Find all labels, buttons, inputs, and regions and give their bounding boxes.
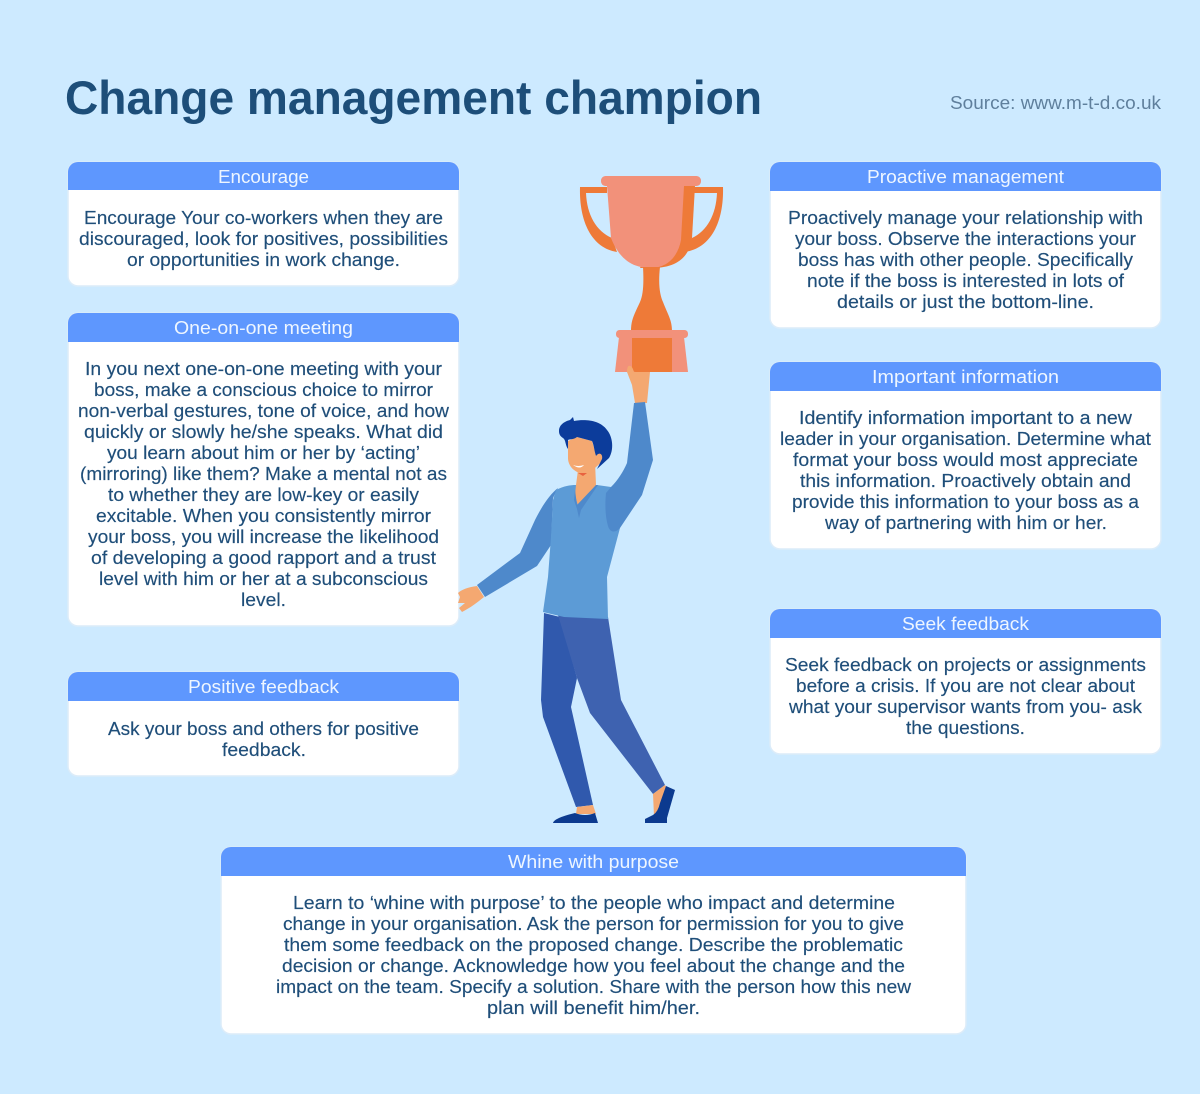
text: seek feedback: before a crisis. If you are not clear about — [796, 675, 1135, 696]
text: one-on-one meeting: non-verbal gestures, tone of voice, and how — [78, 400, 450, 421]
text: one-on-one meeting: your boss, you will increase the likelihood — [88, 526, 439, 547]
text: one-on-one meeting: to whether they are low-key or easily — [108, 484, 420, 505]
text: positive feedback — [108, 718, 419, 760]
panel: proactive management — [770, 162, 1161, 328]
front foot — [653, 785, 667, 816]
heading: important information — [770, 362, 1161, 391]
panel: encourage — [68, 162, 459, 286]
heading: important information: Important information — [872, 366, 1059, 387]
text: one-on-one meeting — [78, 358, 450, 610]
raised arm — [605, 402, 653, 532]
text: seek feedback: the questions. — [906, 717, 1025, 738]
torso — [543, 485, 620, 619]
icon: trophy — [580, 176, 723, 372]
text: important information — [780, 407, 1151, 533]
lowered arm — [477, 488, 558, 597]
text: one-on-one meeting: excitable. When you consistently mirror — [96, 505, 431, 526]
heading: seek feedback: Seek feedback — [902, 613, 1030, 634]
heading: encourage: Encourage — [218, 166, 309, 187]
text: positive feedback: feedback. — [222, 739, 306, 760]
heading: one-on-one meeting — [68, 313, 459, 342]
text: proactive management — [788, 207, 1143, 312]
text: important information: Identify information important to a new — [799, 407, 1133, 428]
text: positive feedback: Ask your boss and others for positive — [108, 718, 419, 739]
heading: positive feedback — [68, 672, 459, 701]
text: one-on-one meeting: level with him or her at a subconscious — [99, 568, 428, 589]
heading: proactive management: Proactive management — [867, 166, 1064, 187]
text: one-on-one meeting: In you next one-on-one meeting with your — [85, 358, 442, 379]
text: important information: way of partnering with him or her. — [824, 512, 1107, 533]
title: Change management champion — [65, 71, 762, 124]
text: whine with purpose: Learn to ‘whine with purpose’ to the people who impact and determine — [293, 892, 895, 913]
text: important information: provide this information to your boss as a — [792, 491, 1140, 512]
text: encourage — [79, 207, 448, 270]
panel: one-on-one meeting — [68, 313, 459, 626]
front leg — [558, 615, 665, 794]
heading: whine with purpose — [221, 847, 966, 876]
text: seek feedback — [785, 654, 1146, 738]
text: one-on-one meeting: of developing a good rapport and a trust — [91, 547, 436, 568]
text: seek feedback: what your supervisor wants from you- ask — [788, 696, 1143, 717]
text: whine with purpose: decision or change. Acknowledge how you feel about the change and the — [282, 955, 905, 976]
text: whine with purpose — [276, 892, 912, 1018]
text: whine with purpose: impact on the team. Specify a solution. Share with the person how this new — [276, 976, 912, 997]
back shoe — [553, 813, 598, 823]
text: encourage: Encourage Your co-workers when they are — [84, 207, 443, 228]
sweater collar — [574, 485, 598, 518]
text: proactive management: note if the boss is interested in lots of — [807, 270, 1125, 291]
heading: encourage — [68, 162, 459, 190]
text: whine with purpose: plan will benefit him/her. — [487, 997, 700, 1018]
text: proactive management: details or just the bottom-line. — [837, 291, 1094, 312]
text: proactive management: boss has with other people. Specifically — [798, 249, 1134, 270]
text: encourage: or opportunities in work change. — [127, 249, 400, 270]
panel: seek feedback — [770, 609, 1161, 754]
text: important information: leader in your organisation. Determine what — [780, 428, 1151, 449]
neck — [575, 462, 596, 506]
text: important information: format your boss would most appreciate — [793, 449, 1138, 470]
illustration: man holding trophy — [458, 366, 675, 823]
face — [568, 437, 603, 473]
panel: important information — [770, 362, 1161, 549]
text: one-on-one meeting: boss, make a conscious choice to mirror — [94, 379, 433, 400]
text: whine with purpose: them some feedback on the proposed change. Describe the problematic — [284, 934, 903, 955]
source note: Source: www.m-t-d.co.uk — [950, 92, 1162, 113]
text: one-on-one meeting: quickly or slowly he/she speaks. What did — [84, 421, 443, 442]
text: one-on-one meeting: you learn about him or her by ‘acting’ — [107, 442, 420, 463]
heading: proactive management — [770, 162, 1161, 191]
text: proactive management: your boss. Observe the interactions your — [795, 228, 1136, 249]
text: one-on-one meeting: level. — [241, 589, 286, 610]
raised hand — [627, 366, 650, 403]
heading: positive feedback: Positive feedback — [188, 676, 340, 697]
lowered hand — [458, 586, 484, 612]
text: important information: this information. Proactively obtain and — [800, 470, 1131, 491]
back foot — [576, 805, 596, 814]
text: one-on-one meeting: (mirroring) like them? Make a mental not as — [80, 463, 447, 484]
text: whine with purpose: change in your organisation. Ask the person for permission for you to give — [283, 913, 904, 934]
heading: one-on-one meeting: One-on-one meeting — [174, 317, 353, 338]
heading: whine with purpose: Whine with purpose — [508, 851, 679, 872]
panel: whine with purpose — [221, 847, 966, 1034]
text: seek feedback: Seek feedback on projects or assignments — [785, 654, 1146, 675]
text: encourage: discouraged, look for positives, possibilities — [79, 228, 448, 249]
panel: positive feedback — [68, 672, 459, 776]
heading: seek feedback — [770, 609, 1161, 638]
text: proactive management: Proactively manage your relationship with — [788, 207, 1143, 228]
front shoe — [645, 786, 675, 823]
back leg — [541, 613, 593, 807]
chin shadow — [578, 473, 587, 476]
mouth — [573, 465, 584, 468]
hair — [559, 417, 612, 469]
